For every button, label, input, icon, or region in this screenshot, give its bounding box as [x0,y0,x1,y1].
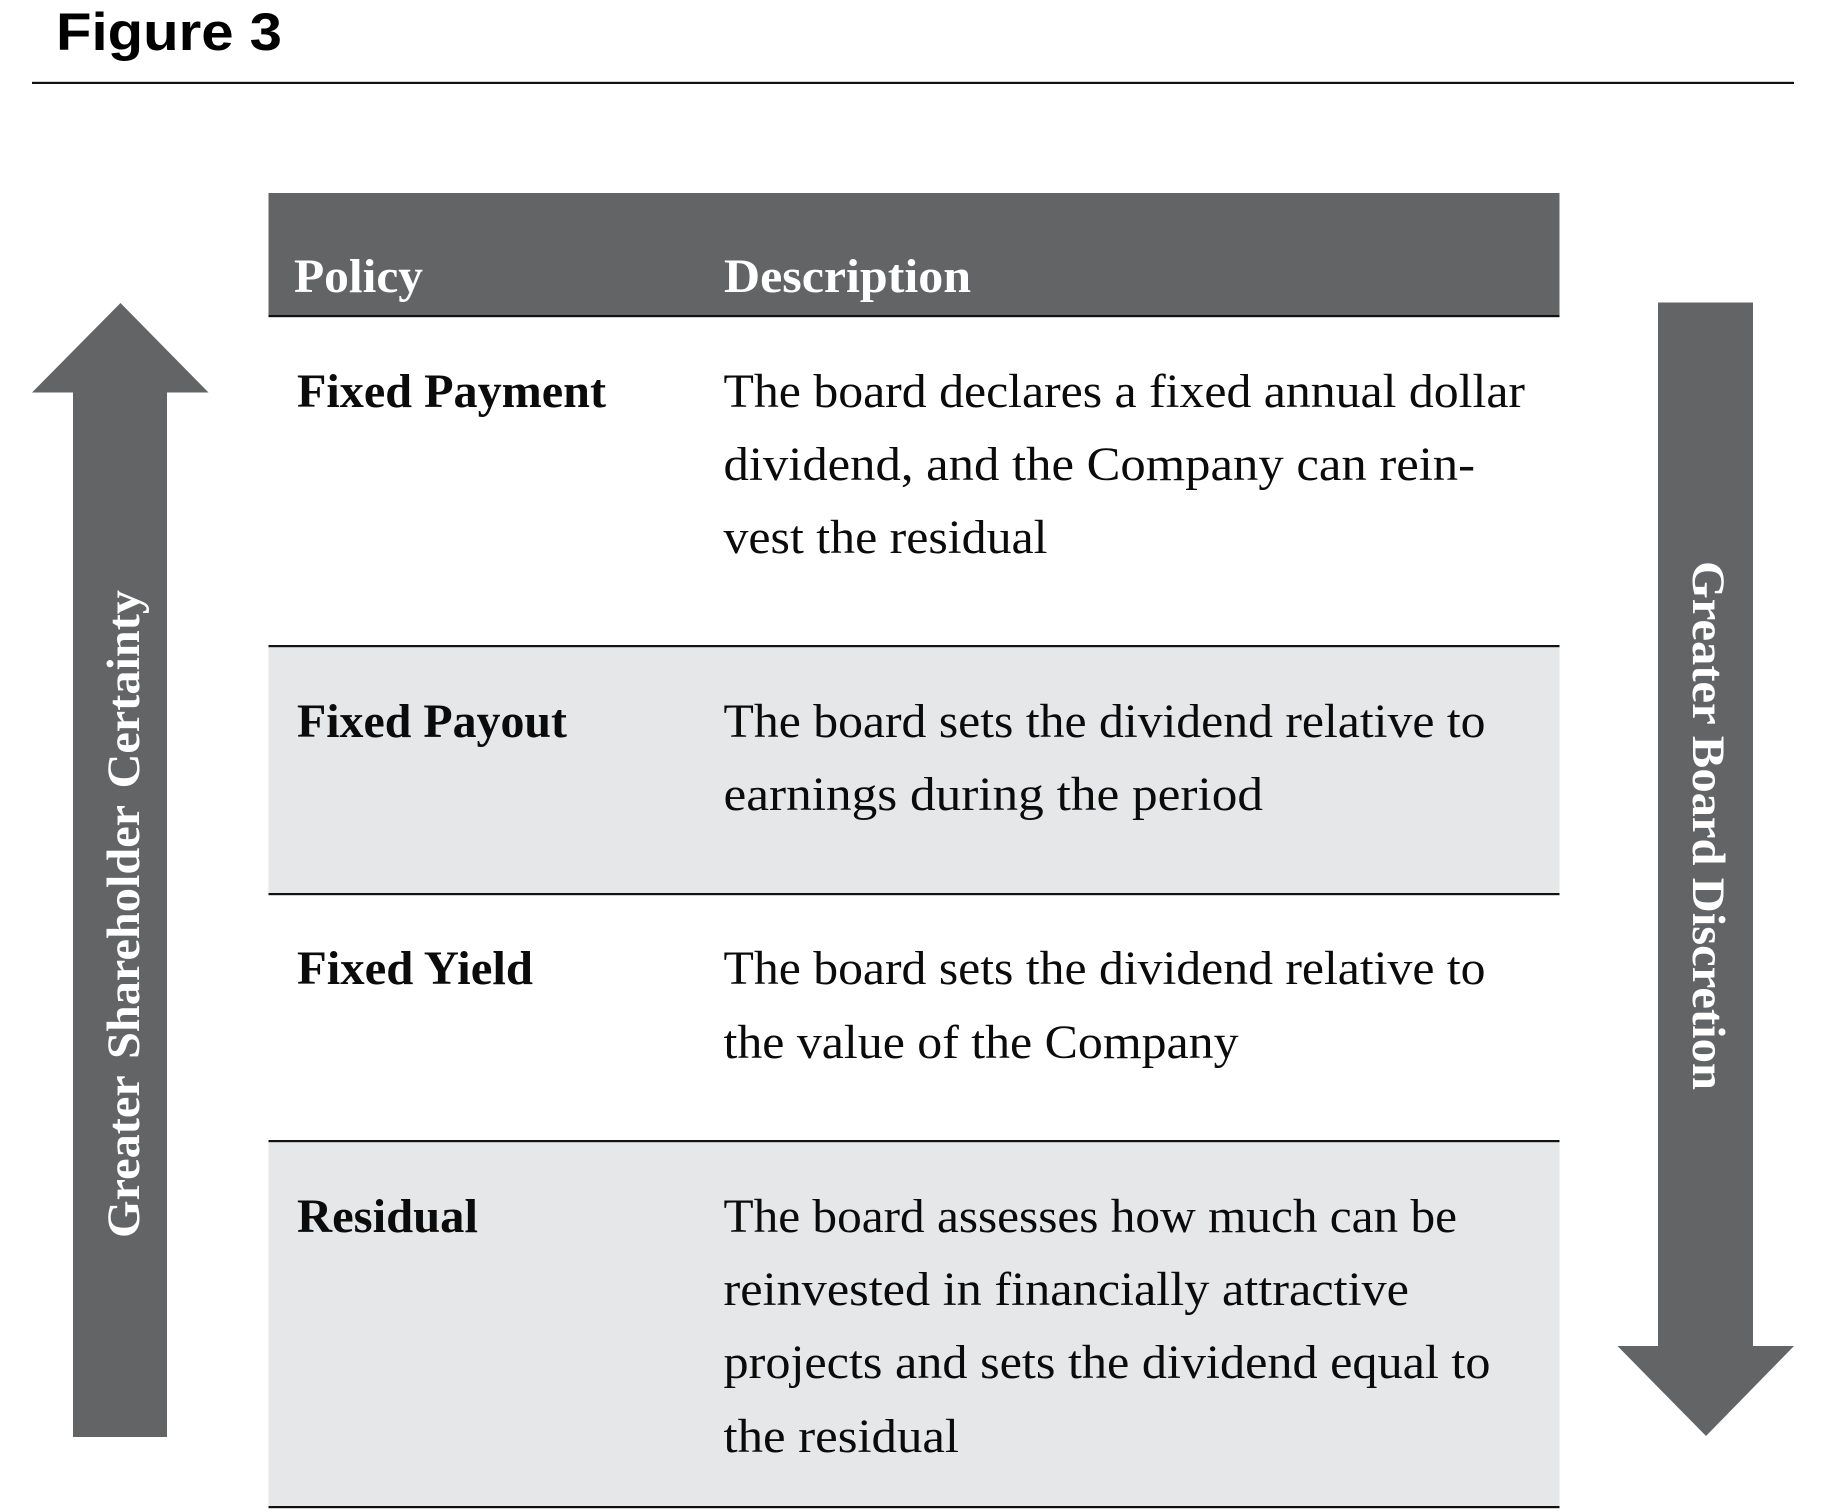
row: fixed payment: dividend, and the Company can rein- [724,438,1475,491]
row: residual: Residual [297,1190,478,1243]
row: residual: the residual [724,1410,959,1463]
row: fixed payout: earnings during the period [724,768,1263,821]
row: fixed payout: Fixed Payout [297,695,567,748]
arrow: greater shareholder certainty: Greater Shareholder Certainty [98,589,150,1238]
arrow: greater shareholder certainty [32,303,208,1437]
row: fixed yield [268,893,1560,1069]
row: fixed yield: the value of the Company [724,1016,1238,1069]
row: residual [268,1140,1560,1508]
row: fixed payment [297,365,1525,564]
table header: Description [724,250,971,303]
row: fixed yield: The board sets the dividend relative to [724,942,1486,995]
table header [268,193,1560,317]
title: Figure 3 [56,3,282,62]
row: fixed payment: Fixed Payment [297,365,606,418]
row: fixed payment: vest the residual [724,511,1048,564]
row: fixed payment: The board declares a fixed annual dollar [724,365,1525,418]
row: fixed payout [268,645,1560,893]
row: fixed payout: The board sets the dividend relative to [724,695,1486,748]
row: residual: reinvested in financially attractive [724,1263,1409,1316]
title rule [32,82,1794,84]
arrow: greater board discretion: Greater Board Discretion [1682,561,1734,1090]
row: residual: The board assesses how much can be [724,1190,1457,1243]
arrow: greater board discretion [1618,302,1794,1436]
row: fixed yield: Fixed Yield [297,942,533,995]
row: residual: projects and sets the dividend equal to [724,1336,1490,1389]
table [268,193,1560,1508]
table header: Policy [294,250,423,303]
